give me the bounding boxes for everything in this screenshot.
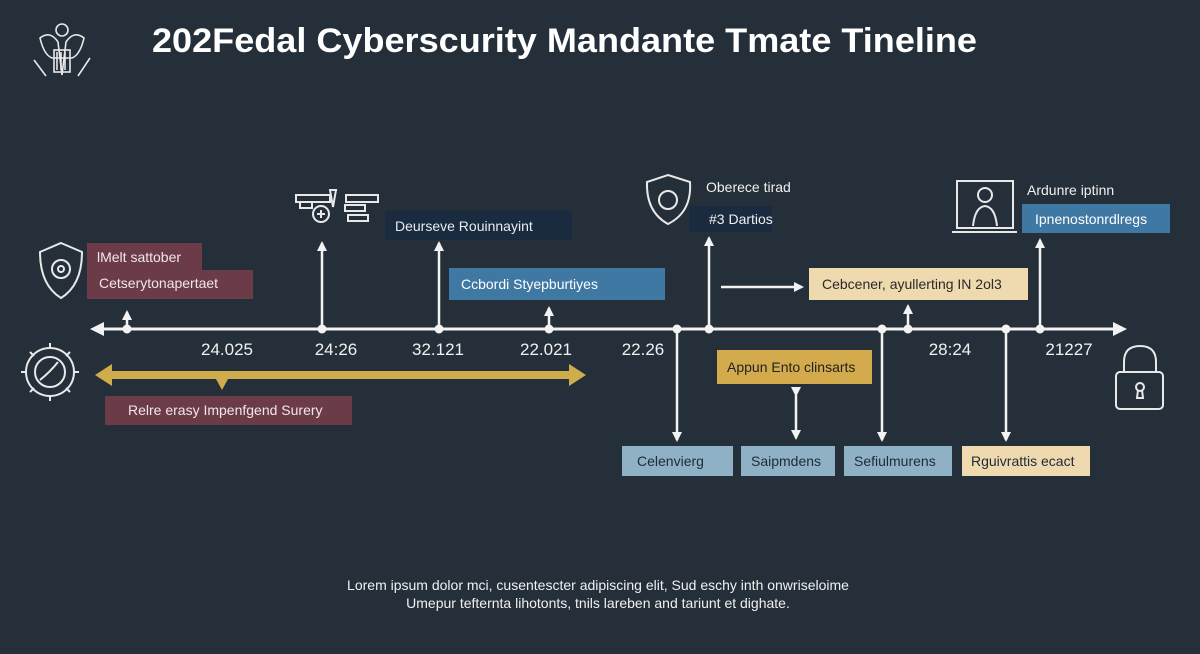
- gold range arrow: [95, 364, 586, 390]
- bottom boxes: Sefiulmurens: [854, 453, 936, 469]
- box: Oberece tirad: #3 Dartios: [709, 211, 773, 227]
- title: 202Fedal Cyberscurity Mandante Tmate Tineline: [152, 22, 977, 60]
- box: Cebcener: Cebcener, ayullerting IN 2ol3: [822, 276, 1002, 292]
- box: Relre erasy: Relre erasy Impenfgend Surery: [128, 402, 323, 418]
- markers and connectors: [122, 238, 1044, 440]
- date labels: 28:24: [929, 340, 971, 359]
- timeline axis: [90, 322, 1127, 336]
- date labels: [201, 340, 1093, 359]
- box: Deurseve: [385, 211, 572, 240]
- icon: devices: [296, 190, 378, 222]
- bottom boxes: Saipmdens: [751, 453, 821, 469]
- date labels: 32.121: [412, 340, 464, 359]
- box: Deurseve: Deurseve Rouinnayint: [395, 218, 533, 234]
- box: Ccbordi: [449, 268, 665, 300]
- bottom boxes: [622, 446, 1090, 476]
- footer text: Umepur tefternta lihotonts, tnils lareben and tariunt et dighate.: [406, 595, 790, 611]
- date labels: 24.025: [201, 340, 253, 359]
- box: Ccbordi: Ccbordi Styepburtiyes: [461, 276, 598, 292]
- box: Cebcener: [809, 268, 1028, 300]
- icon: padlock: [1116, 346, 1163, 409]
- bottom boxes: Celenvierg: [637, 453, 704, 469]
- box: Appun: [717, 350, 872, 384]
- icon: shield bird: [647, 175, 690, 224]
- icon: gear: [21, 343, 79, 401]
- icon: seal: [34, 24, 90, 76]
- box: Ardunre: [1022, 182, 1170, 233]
- icon: shield gear: [40, 243, 82, 298]
- date labels: 22.021: [520, 340, 572, 359]
- box: Oberece tirad: [689, 179, 791, 232]
- box: Imelt sattober: Cetserytonapertaet: [99, 275, 218, 291]
- box: Imelt sattober: lMelt sattober: [97, 249, 181, 265]
- date labels: 22.26: [622, 340, 664, 359]
- icon: monitor person: [952, 181, 1017, 232]
- date labels: 21227: [1045, 340, 1093, 359]
- box: Oberece tirad: Oberece tirad: [706, 179, 791, 195]
- box: Appun: Appun Ento clinsarts: [727, 359, 855, 375]
- box: Ardunre: Ardunre iptinn: [1027, 182, 1114, 198]
- box: Ardunre: Ipnenostonrdlregs: [1035, 211, 1147, 227]
- footer text: [347, 577, 849, 611]
- footer text: Lorem ipsum dolor mci, cusentescter adipiscing elit, Sud eschy inth onwriseloime: [347, 577, 849, 593]
- date labels: 24:26: [315, 340, 357, 359]
- box: Imelt sattober: [87, 243, 253, 299]
- box: Relre erasy: [105, 396, 352, 425]
- bottom boxes: Rguivrattis ecact: [971, 453, 1075, 469]
